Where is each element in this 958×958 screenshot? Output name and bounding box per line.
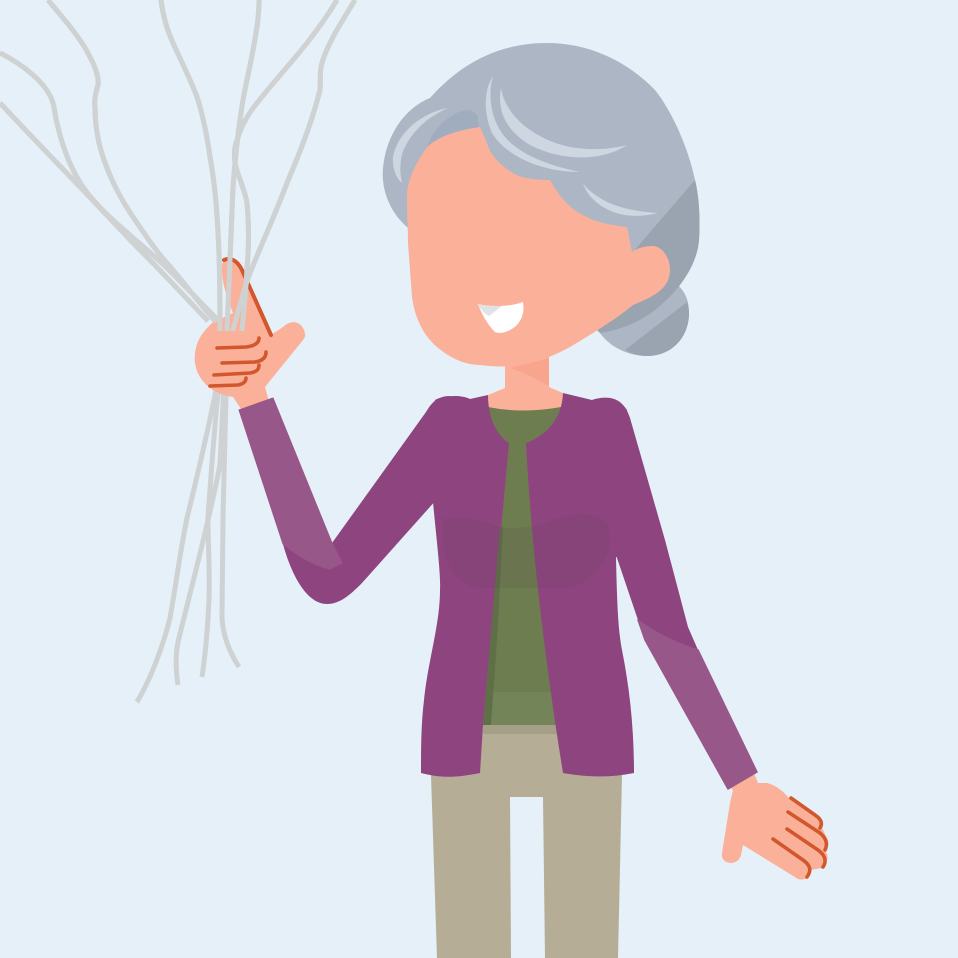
pants <box>431 725 623 958</box>
raised hand <box>195 259 305 415</box>
finger lines <box>210 338 266 386</box>
jacket right panel <box>526 393 634 776</box>
right sleeve (viewer right) <box>600 398 757 789</box>
shirt fold shadow <box>483 527 503 725</box>
hair highlights <box>393 76 658 216</box>
hair mass <box>383 43 700 333</box>
balloon strings <box>0 0 355 702</box>
finger lines <box>773 798 826 877</box>
smile teeth <box>478 302 523 333</box>
bun <box>600 285 689 356</box>
jacket left panel <box>421 395 509 777</box>
face and ear <box>407 127 670 366</box>
neck <box>488 355 563 412</box>
lowered hand <box>722 768 828 880</box>
strings over the hand <box>0 0 356 331</box>
thumb edge line <box>224 259 271 335</box>
shirt <box>483 407 561 734</box>
hair back and bun <box>383 43 700 356</box>
chest shading <box>442 514 610 588</box>
raised sleeve (viewer left) <box>239 396 450 604</box>
